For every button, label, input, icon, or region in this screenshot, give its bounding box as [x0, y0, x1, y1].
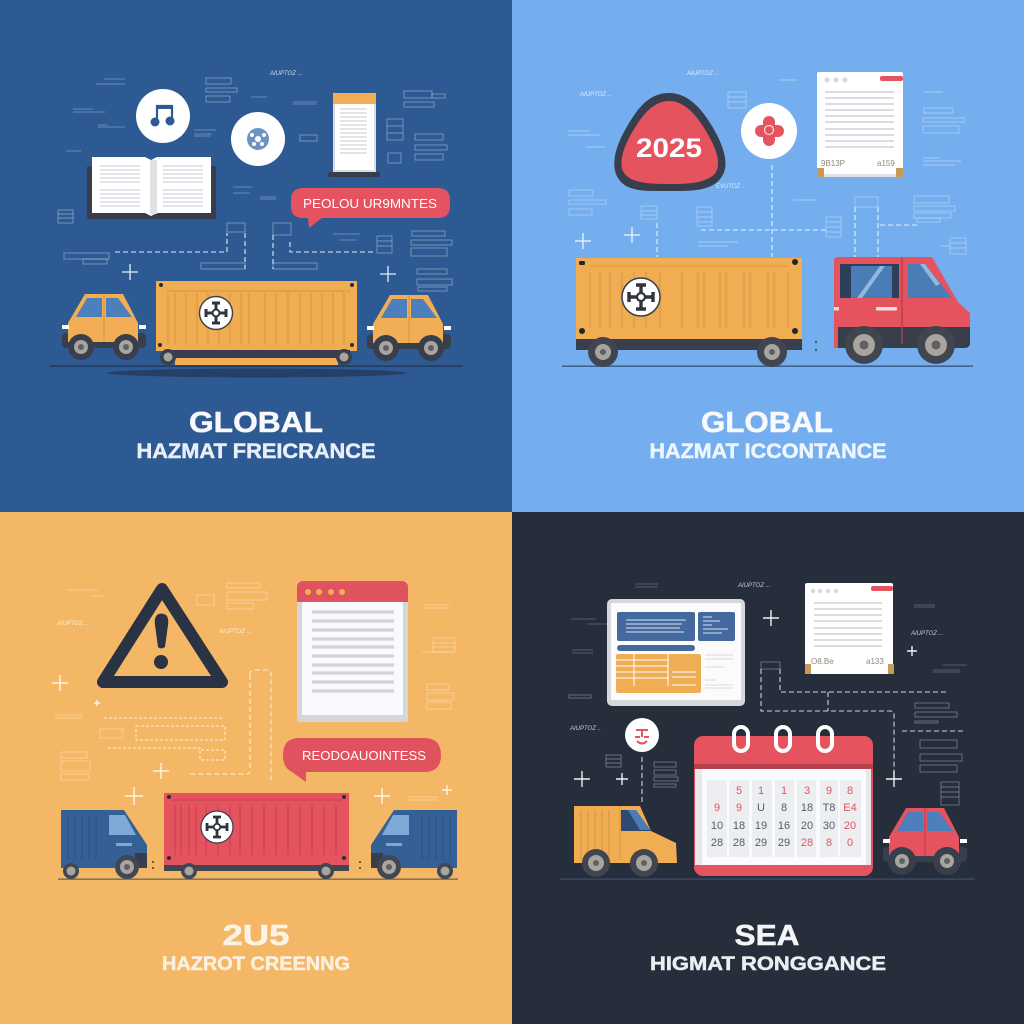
chart: calendar: U [757, 802, 765, 814]
vehicle: yellow car right [367, 295, 451, 361]
icon: document: a159 [877, 159, 895, 168]
title: SEA: SEA [734, 920, 800, 952]
chart: calendar: E4 [843, 802, 857, 814]
callout: red bubble: REODOAUOINTESS [302, 748, 426, 763]
chart: calendar: 8 [781, 802, 787, 814]
label: small caption: AIUPTOZ ... [269, 71, 303, 77]
badge: 2025 [614, 93, 726, 191]
chart: calendar: 30 [823, 820, 835, 832]
icon: dashboard screen [607, 599, 745, 706]
chart: calendar: 16 [778, 820, 790, 832]
subtitle: HAZROT CREENNG [162, 954, 350, 975]
label: small captions: AIUPTOZ ... [910, 631, 944, 637]
chart: calendar: 28 [801, 837, 813, 849]
icon: pin circle [625, 718, 659, 752]
chart: calendar: T8 [823, 802, 835, 814]
badge: 2025: 2025 [636, 133, 702, 163]
vehicle: shadow and ground [50, 366, 463, 378]
vehicle: ground line [562, 366, 973, 367]
chart: calendar: 28 [711, 837, 723, 849]
callout: red bubble [283, 738, 441, 782]
icon: document [805, 583, 894, 674]
chart: calendar: 18 [733, 820, 745, 832]
panel: bottom right navy [512, 512, 1024, 1024]
chart: calendar: 8 [847, 785, 853, 797]
chart: calendar: 1 [781, 785, 787, 797]
subtitle: HAZMAT ICCONTANCE [650, 440, 886, 463]
vehicle: blue van right [371, 810, 457, 879]
chart: calendar: 20 [844, 820, 856, 832]
chart: calendar: 1 [758, 785, 764, 797]
icon: browser document [297, 581, 408, 722]
icon: document: 9B13P [821, 159, 845, 168]
icon: warning triangle [103, 589, 222, 682]
label: small captions: AIUPTOZ ... [218, 629, 252, 635]
panel: top left blue [0, 0, 512, 512]
label: small captions [579, 71, 745, 190]
chart: calendar: 8 [826, 837, 832, 849]
subtitle: HIGMAT RONGGANCE [650, 954, 886, 975]
label: small captions [569, 583, 944, 732]
vehicle: orange van [574, 806, 677, 877]
icon: open book [87, 157, 216, 219]
chart: calendar: 0 [847, 837, 853, 849]
chart: calendar: 29 [755, 837, 767, 849]
icon: phone document [328, 93, 380, 177]
plus markers [52, 675, 452, 805]
vehicle: ground line [58, 878, 458, 880]
panel: bottom left amber [0, 512, 512, 1024]
plus markers [574, 610, 917, 787]
chart: calendar: 3 [804, 785, 810, 797]
icon: film disc [231, 112, 285, 166]
icon: document: O8.Be [811, 657, 834, 666]
label: small captions: AIUPTOZ .. [569, 726, 601, 732]
label: small captions: AIUPTOZ .. [686, 71, 718, 77]
callout: red bubble: PEOLOU UR9MNTES [303, 196, 437, 211]
title: GLOBAL: GLOBAL [701, 407, 833, 439]
callout: red bubble [291, 188, 450, 228]
vehicle: red car [883, 808, 967, 875]
icon: music note [136, 89, 190, 143]
chart: calendar: 28 [733, 837, 745, 849]
label: small captions [56, 621, 252, 635]
chart: calendar: 20 [801, 820, 813, 832]
label: small captions: AIUPTOZ ... [737, 583, 771, 589]
vehicle: ground line [560, 878, 975, 880]
vehicle: blue van left [61, 810, 147, 879]
plus markers [575, 227, 640, 249]
vehicle: yellow car left [62, 294, 146, 360]
chart: calendar: 10 [711, 820, 723, 832]
chart: calendar: 9 [736, 802, 742, 814]
label: small captions: AIUPTOZ ... [56, 621, 90, 627]
chart: calendar: 5 [736, 785, 742, 797]
panel: top right light blue [512, 0, 1024, 512]
chart: calendar: 9 [826, 785, 832, 797]
icon: document [817, 72, 903, 177]
label: small captions: AIUPTOZ .. [579, 92, 611, 98]
plus markers [122, 264, 396, 282]
vehicle: yellow container truck [576, 258, 817, 367]
label: small captions: EVUTOZ .. [716, 184, 745, 190]
chart: calendar [694, 727, 873, 876]
icon: document: a133 [866, 657, 884, 666]
vehicle: red truck [834, 257, 970, 364]
chart: calendar: 9 [714, 802, 720, 814]
title: GLOBAL: GLOBAL [189, 407, 323, 439]
vehicle: red container [152, 793, 361, 879]
chart: calendar: 19 [755, 820, 767, 832]
vehicle: yellow container [156, 281, 357, 365]
subtitle: HAZMAT FREICRANCE [136, 440, 376, 463]
icon: red cross circle [741, 103, 797, 159]
chart: calendar: 29 [778, 837, 790, 849]
title: 2U5: 2U5 [222, 920, 290, 952]
chart: calendar: 18 [801, 802, 813, 814]
